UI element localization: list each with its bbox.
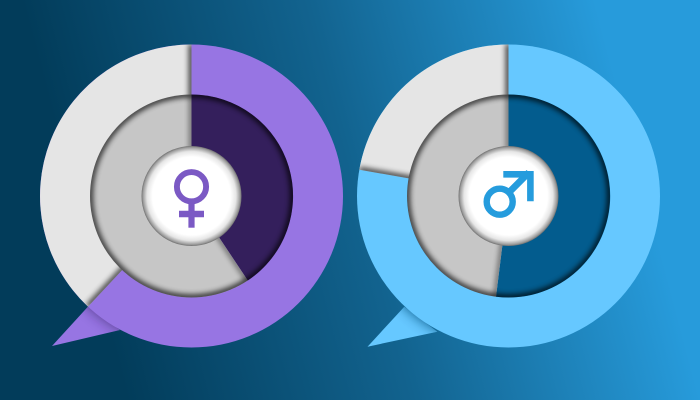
male donut chart xyxy=(357,44,660,348)
centre hub: male xyxy=(458,146,558,246)
female donut chart xyxy=(40,44,343,348)
inner ring: male dark blue share xyxy=(496,94,610,297)
outer ring: female purple share xyxy=(40,44,343,348)
inner ring: male grey remainder xyxy=(407,94,610,298)
icon: male symbol xyxy=(487,172,530,215)
inner ring: female dark purple share xyxy=(192,94,293,281)
speech bubble tail: female xyxy=(52,306,120,346)
outer ring: male blue share xyxy=(357,44,660,348)
speech bubble tail: male xyxy=(368,306,438,347)
outer ring: male grey remainder xyxy=(359,44,508,178)
icon: female symbol xyxy=(177,172,206,228)
inner ring: female grey remainder xyxy=(90,94,293,298)
centre hub: female xyxy=(142,146,242,246)
outer ring: female grey remainder xyxy=(40,44,191,307)
